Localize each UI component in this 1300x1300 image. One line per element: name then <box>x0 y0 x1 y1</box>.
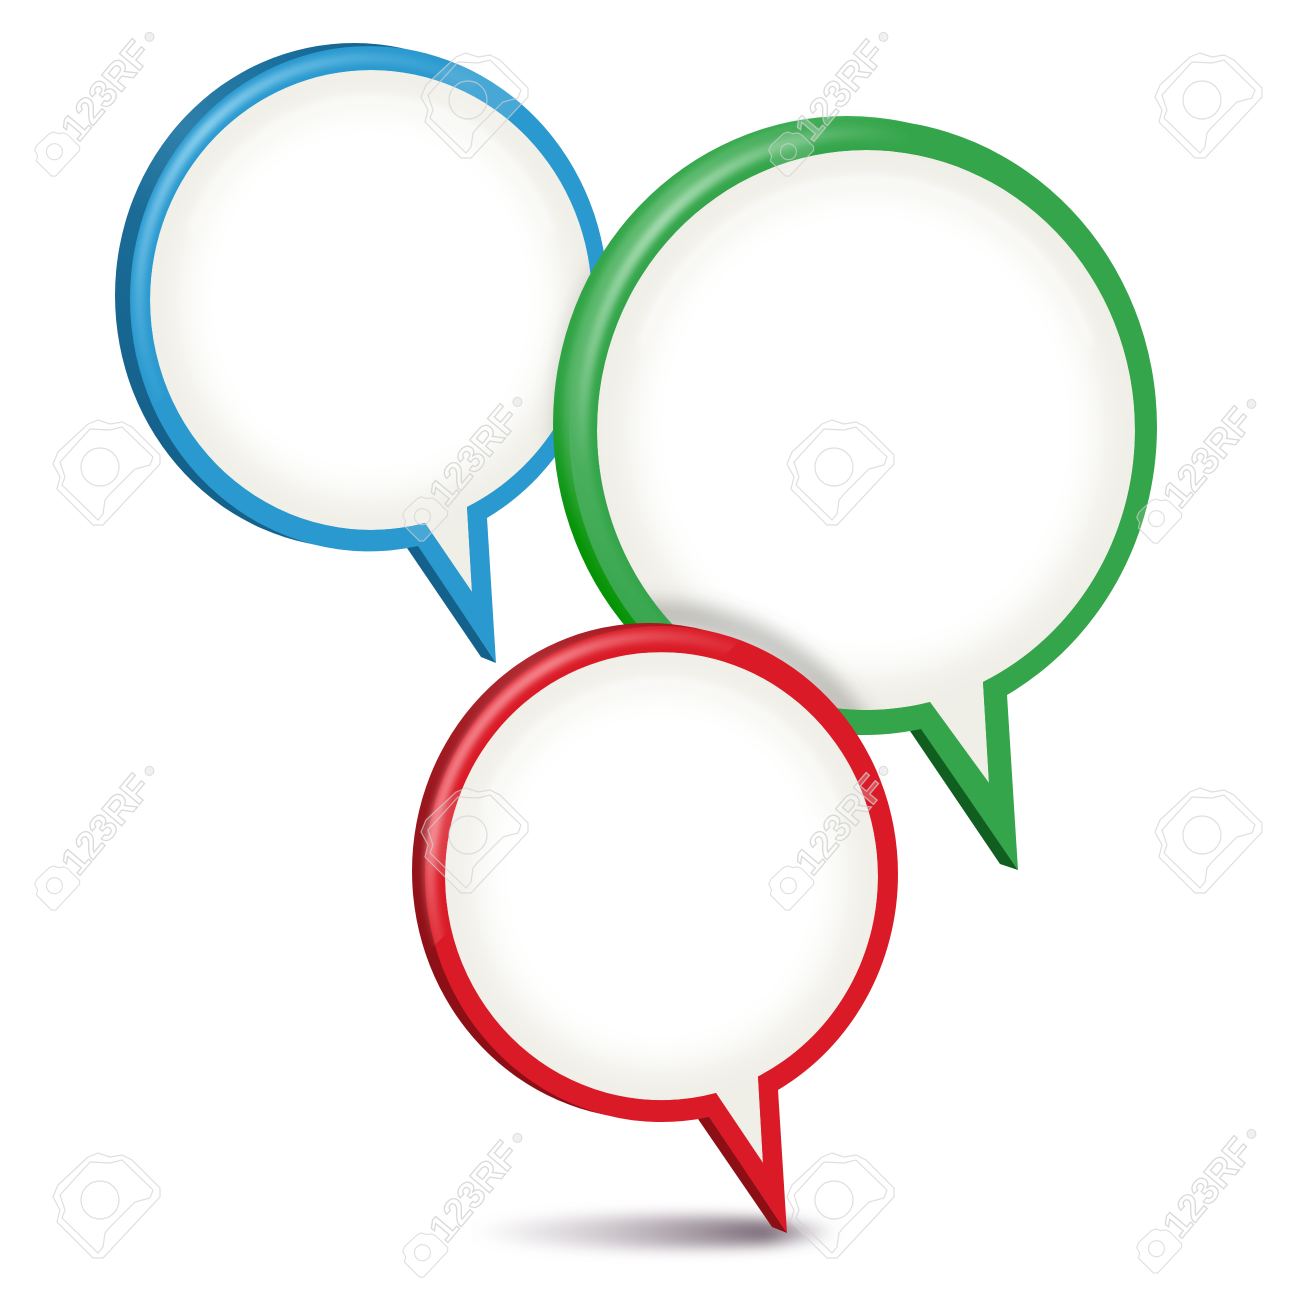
red bubble 3D back edge <box>412 623 885 1233</box>
watermark logo row 1 left <box>13 16 180 198</box>
watermark logo row 2 centre <box>381 381 548 563</box>
watermark logo row 3 left: 123RF <box>53 767 160 883</box>
red bubble inner panel <box>445 652 878 1163</box>
watermark logo row 1 left: 123RF <box>53 33 160 149</box>
watermark logo row 2 centre: 123RF <box>421 398 528 514</box>
watermark logo row 1 right <box>747 16 914 198</box>
watermark camera row 1 far right <box>1155 53 1262 158</box>
watermark camera row 4 left <box>53 1153 160 1258</box>
watermark camera row 2 left <box>53 420 160 525</box>
watermark logo row 2 right: 123RF <box>1155 400 1262 516</box>
panel: blue speech bubble <box>115 43 604 663</box>
watermark camera row 4 centre-right <box>787 1153 894 1258</box>
blue bubble inner panel <box>150 70 590 592</box>
watermark logo row 3 right: 123RF <box>787 767 894 883</box>
panel: red speech bubble <box>412 623 898 1233</box>
green ring highlight <box>561 120 892 610</box>
watermark camera row 1 centre <box>421 53 528 158</box>
blue bubble front ring <box>130 46 608 663</box>
watermark logo row 4 right: 123RF <box>1155 1130 1262 1246</box>
watermark logo row 2 right <box>1115 383 1282 565</box>
green bubble front ring <box>569 119 1157 870</box>
watermark logo row 3 right <box>747 750 914 932</box>
watermark logo row 3 left <box>13 750 180 932</box>
watermark logo row 1 right: 123RF <box>787 33 894 149</box>
blue bubble 3D back edge <box>115 43 593 663</box>
watermark camera row 3 far right <box>1155 788 1262 893</box>
red ring highlight <box>420 628 735 946</box>
floor shadow under red bubble <box>475 1216 835 1248</box>
watermark camera row 2 centre-right <box>787 420 894 525</box>
green bubble 3D back edge <box>553 116 1141 870</box>
panel: green speech bubble <box>553 116 1157 870</box>
red bubble front ring <box>425 626 898 1233</box>
green bubble inner panel <box>597 150 1135 783</box>
watermark logo row 4 centre <box>381 1117 548 1299</box>
watermark logo row 4 centre: 123RF <box>421 1134 528 1250</box>
watermark logo row 4 right <box>1115 1113 1282 1295</box>
blue ring highlight <box>132 51 454 392</box>
watermark camera row 3 centre <box>421 788 528 893</box>
